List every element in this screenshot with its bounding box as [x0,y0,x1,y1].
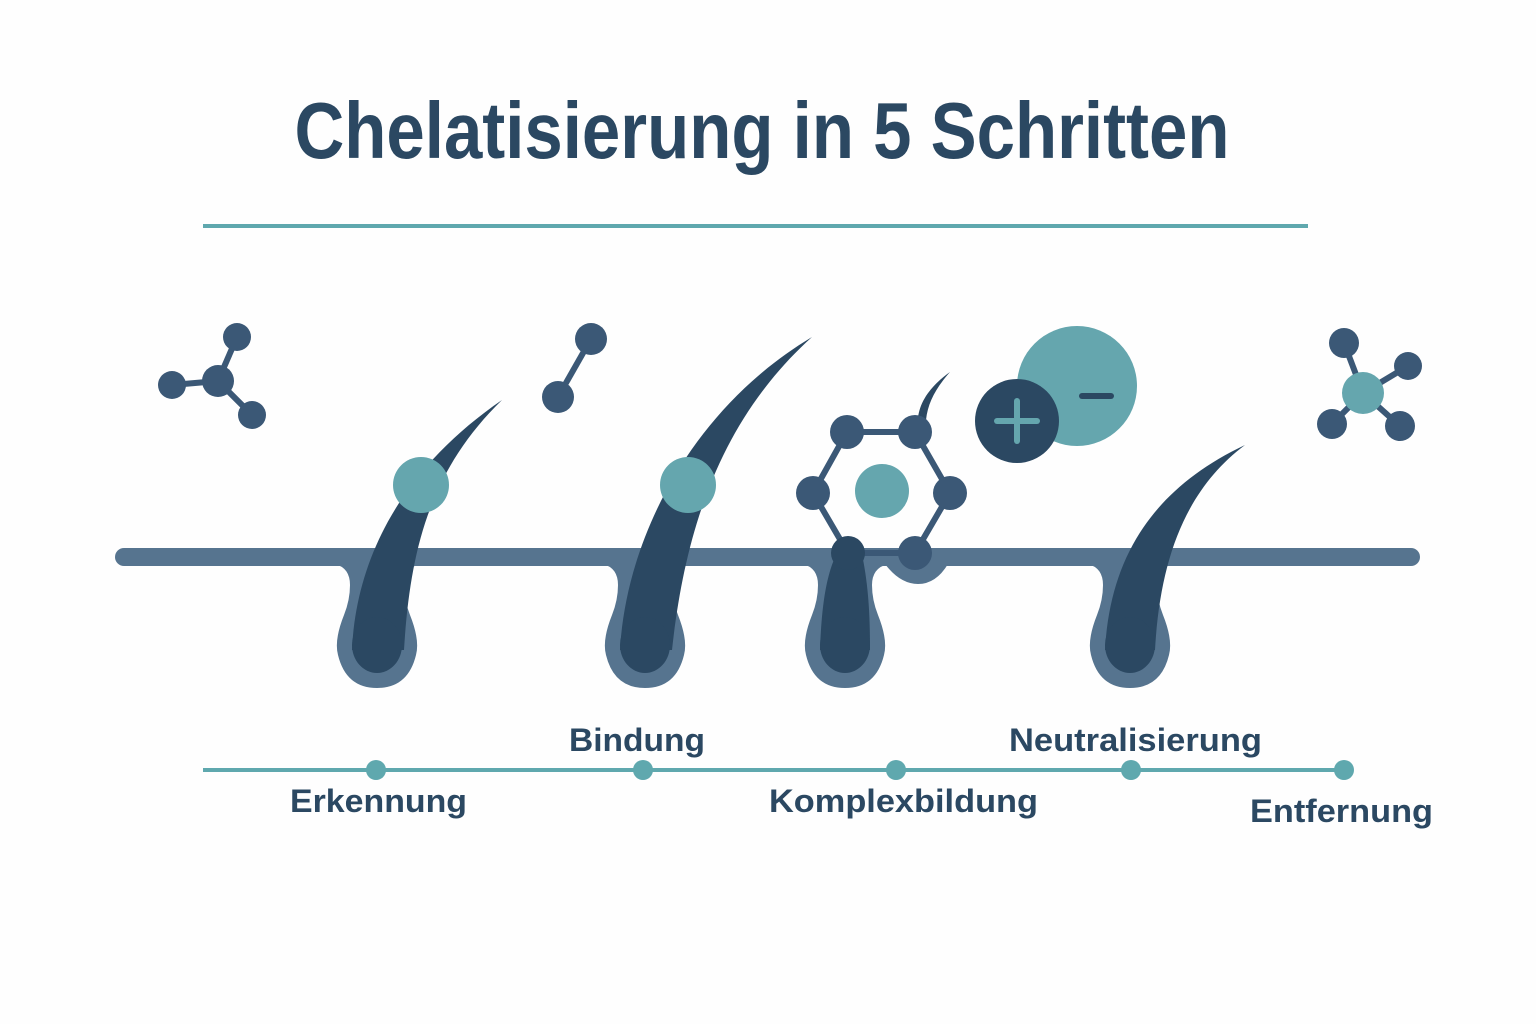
hair 4 [1105,445,1245,673]
metal ion 2 (binding) [660,457,716,513]
label: Neutralisierung: Neutralisierung [1009,722,1262,758]
hair 3 [820,372,950,673]
molecule right (removal) [1317,328,1422,441]
title: Chelatisierung in 5 Schritten [294,86,1230,175]
skin band with follicles [115,548,1420,688]
hair 1 [352,400,502,673]
molecule left [158,323,266,429]
metal ion 1 (recognition) [393,457,449,513]
title underline [203,224,1308,228]
label: Komplexbildung: Komplexbildung [769,783,1038,819]
hair 2 [620,337,812,673]
molecule two-atom [542,323,607,413]
icon: charge neutralisation [975,326,1137,463]
label: Erkennung: Erkennung [290,783,467,819]
label: Bindung: Bindung [569,722,705,758]
label: Entfernung: Entfernung [1250,793,1433,829]
chelate ring complex [796,415,967,570]
timeline [203,760,1354,780]
